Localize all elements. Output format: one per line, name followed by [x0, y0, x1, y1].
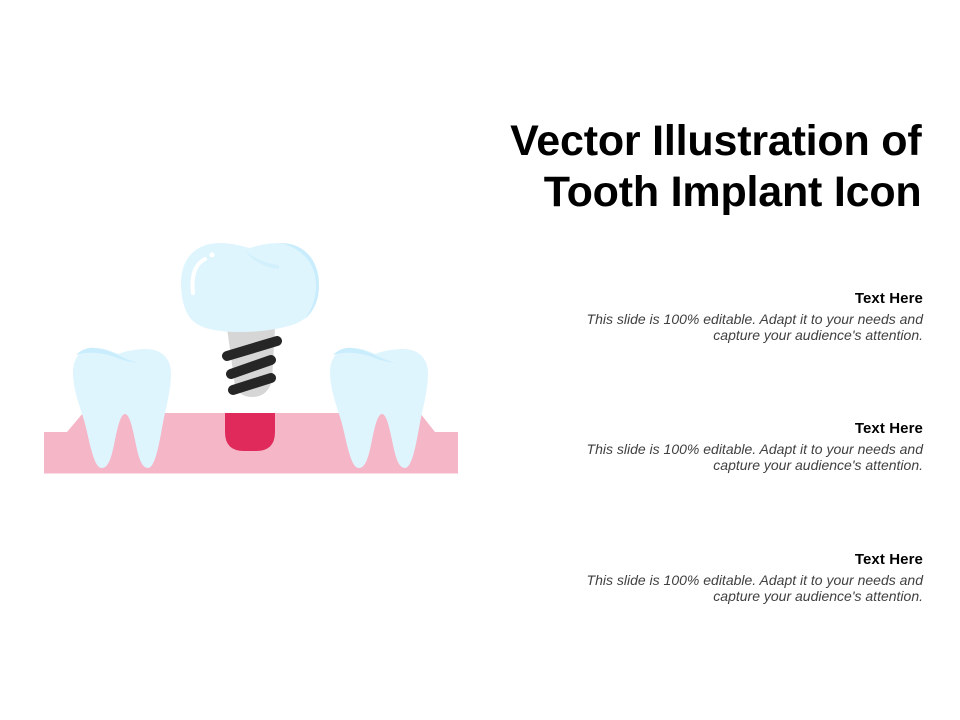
text block 2: This slide is 100% editable. Adapt it to your needs and	[587, 441, 923, 457]
socket	[225, 413, 275, 451]
gum	[44, 413, 458, 474]
title	[510, 117, 922, 216]
text block 1: capture your audience's attention.	[713, 327, 923, 343]
text block 3: Text Here	[855, 551, 923, 568]
text block 1: This slide is 100% editable. Adapt it to your needs and	[587, 311, 923, 327]
text block 2	[587, 420, 924, 473]
left tooth	[73, 348, 171, 468]
text block 2: capture your audience's attention.	[713, 457, 923, 473]
text block 2: Text Here	[855, 420, 923, 437]
title: Vector Illustration of	[510, 117, 922, 165]
text block 1: Text Here	[855, 290, 923, 307]
text block 1	[587, 290, 924, 343]
crown	[181, 243, 319, 332]
text block 3: capture your audience's attention.	[713, 588, 923, 604]
implant screw	[227, 328, 277, 397]
title: Tooth Implant Icon	[544, 168, 922, 216]
right tooth	[330, 348, 428, 468]
text block 3: This slide is 100% editable. Adapt it to your needs and	[587, 572, 923, 588]
text block 3	[587, 551, 924, 604]
